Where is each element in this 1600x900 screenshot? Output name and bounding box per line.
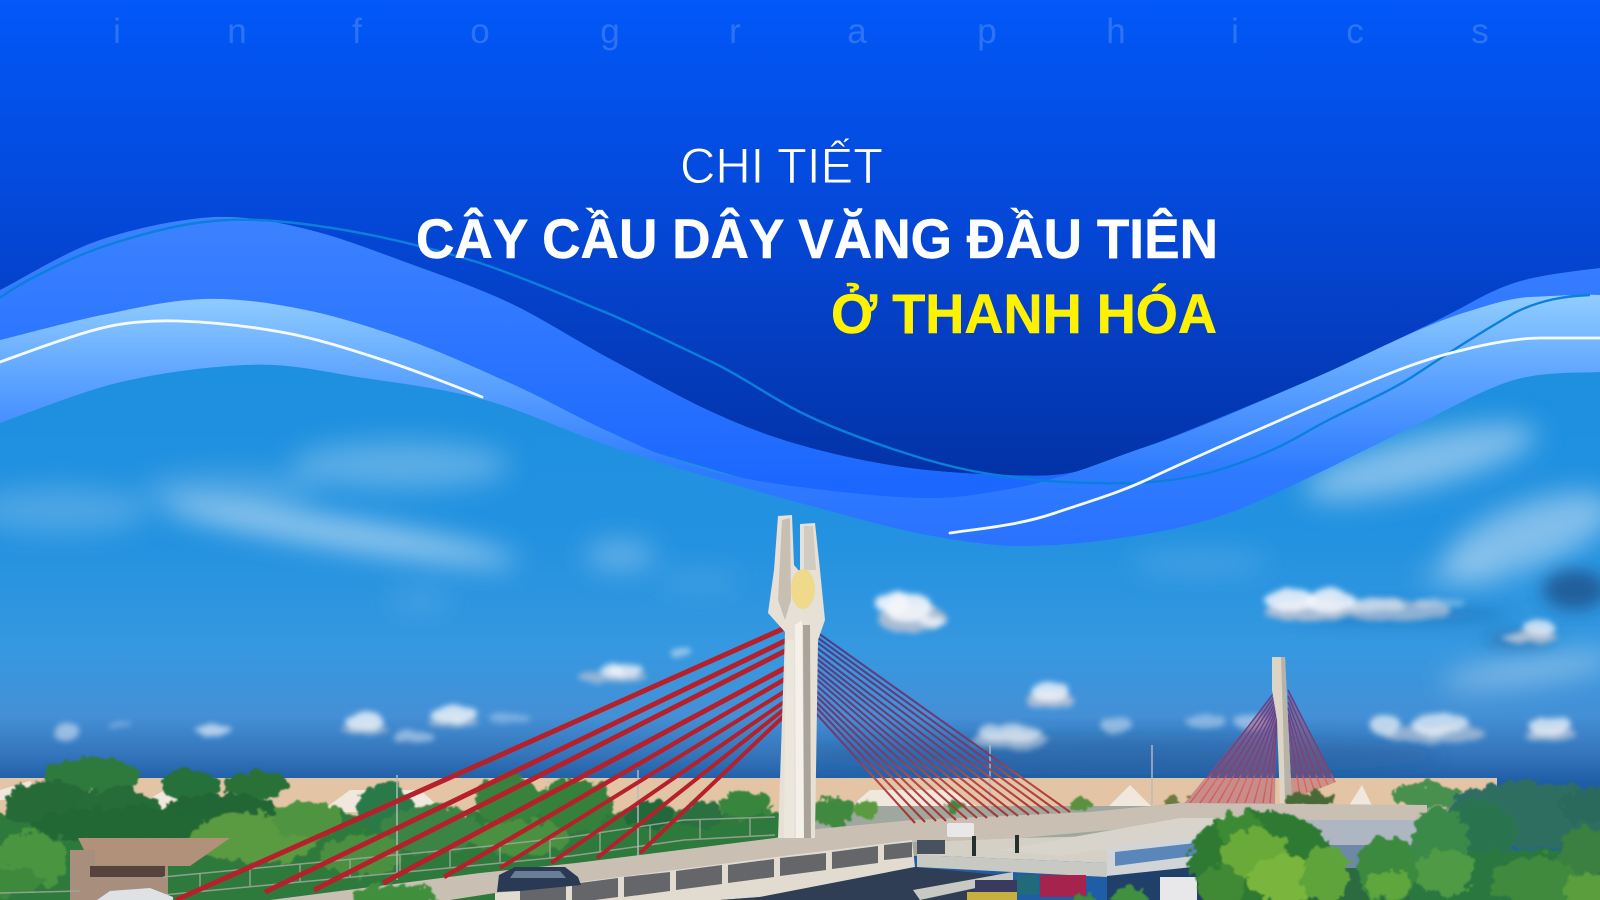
main bridge deck — [270, 803, 1427, 900]
far shore buildings — [0, 778, 1497, 820]
tan roof building — [70, 838, 230, 900]
white wave line, right — [950, 338, 1600, 533]
far bridge tower — [1272, 657, 1292, 803]
main bridge tower — [768, 515, 825, 838]
cars on the deck — [97, 867, 581, 900]
street lamp poles — [397, 745, 1152, 895]
title line 3: Ở THANH HÓA — [831, 282, 1217, 345]
teal wave line — [0, 220, 1590, 483]
right stay cables — [813, 633, 1070, 823]
dark cloud shadows — [800, 570, 1600, 775]
wispy high clouds — [0, 408, 1600, 695]
header fill above wave — [0, 0, 1600, 476]
sky background — [0, 340, 1600, 900]
fence band behind the deck, right — [800, 806, 1440, 856]
roadside fence — [0, 817, 775, 895]
golden medallion — [791, 569, 815, 609]
left stay cables — [176, 627, 787, 900]
white car on deck — [947, 823, 974, 837]
title line 2: CÂY CẦU DÂY VĂNG ĐẦU TIÊN — [416, 207, 1218, 270]
cumulus clouds — [53, 590, 1572, 743]
title line 1: CHI TIẾT — [680, 138, 883, 194]
spaced word: infographics: infographics — [113, 12, 1489, 51]
side ramp and arch span — [913, 818, 1430, 900]
far tower cable fan — [1183, 690, 1336, 805]
pedestrians on the ramp — [972, 835, 1019, 856]
trees behind the deck, left — [0, 758, 1460, 900]
wave band: bright blue — [0, 217, 1600, 505]
cumulus cloud undersides — [341, 599, 1577, 749]
white wave line, left — [0, 321, 482, 397]
wave band: light blue — [0, 295, 1600, 546]
foreground trees, right — [353, 781, 1600, 900]
